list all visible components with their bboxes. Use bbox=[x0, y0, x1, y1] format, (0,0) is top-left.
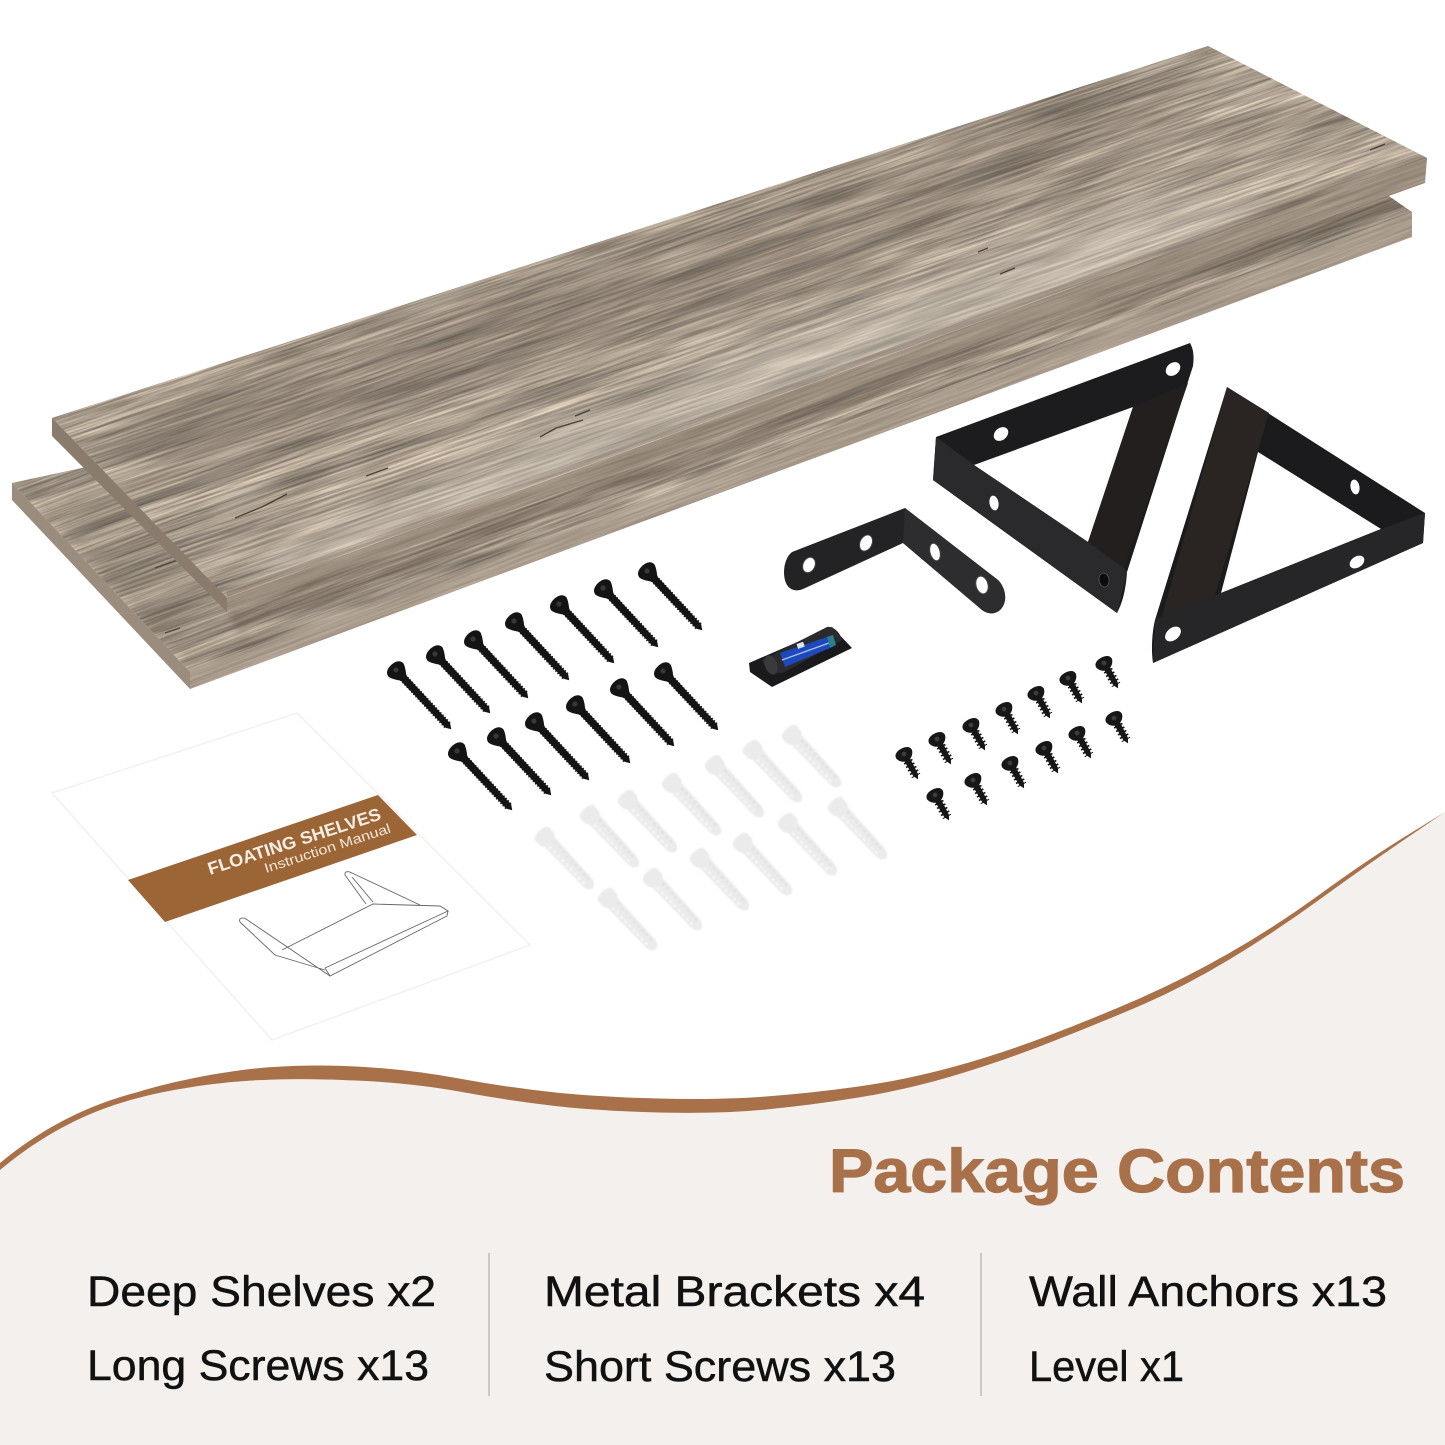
bracket holes bbox=[800, 533, 990, 595]
upper shelf front edge bbox=[227, 158, 1427, 612]
dark tonal band on shelf top bbox=[90, 90, 1190, 480]
instruction manual bbox=[52, 713, 530, 1040]
small L bracket bbox=[784, 508, 1005, 613]
brown wave accent bbox=[0, 812, 1445, 1170]
column 2: brackets and short screws: Short Screws x13 bbox=[544, 1343, 896, 1391]
column 1: shelves and long screws: Long Screws x13 bbox=[87, 1342, 429, 1390]
long screws x13 bbox=[384, 559, 726, 817]
manual shelf line drawing bbox=[240, 872, 448, 976]
manual subtitle: Instruction Manual bbox=[262, 821, 392, 876]
panel: cream wave footer bbox=[0, 812, 1445, 1445]
manual title: FLOATING SHELVES bbox=[205, 804, 383, 879]
short screws x13 bbox=[893, 653, 1136, 825]
triangular metal bracket, right bbox=[1152, 387, 1425, 663]
light tonal band on shelf top bbox=[260, 190, 1290, 590]
bracket holes bbox=[988, 359, 1183, 588]
column 2: brackets and short screws bbox=[544, 1268, 925, 1391]
heading: Package Contents: Package Contents bbox=[829, 1137, 1405, 1205]
blue vial bbox=[780, 637, 830, 667]
bracket holes bbox=[1162, 479, 1367, 644]
upper shelf left edge bbox=[52, 418, 227, 612]
column 2: brackets and short screws: Metal Brackets x4 bbox=[544, 1268, 925, 1316]
wall anchors x13 bbox=[532, 722, 893, 956]
triangular metal bracket, left bbox=[933, 343, 1194, 613]
lower shelf left edge bbox=[12, 483, 190, 689]
lower wooden shelf bbox=[12, 196, 1412, 689]
column 1: shelves and long screws bbox=[87, 1268, 436, 1390]
column 1: shelves and long screws: Deep Shelves x2 bbox=[87, 1268, 436, 1316]
upper wooden shelf bbox=[52, 46, 1427, 612]
spirit level bbox=[749, 627, 852, 687]
lower shelf front edge bbox=[190, 212, 1412, 689]
column 3: anchors and level: Wall Anchors x13 bbox=[1029, 1268, 1387, 1316]
column 3: anchors and level bbox=[1029, 1268, 1387, 1391]
manual brown band bbox=[128, 795, 417, 922]
column 3: anchors and level: Level x1 bbox=[1029, 1343, 1184, 1391]
